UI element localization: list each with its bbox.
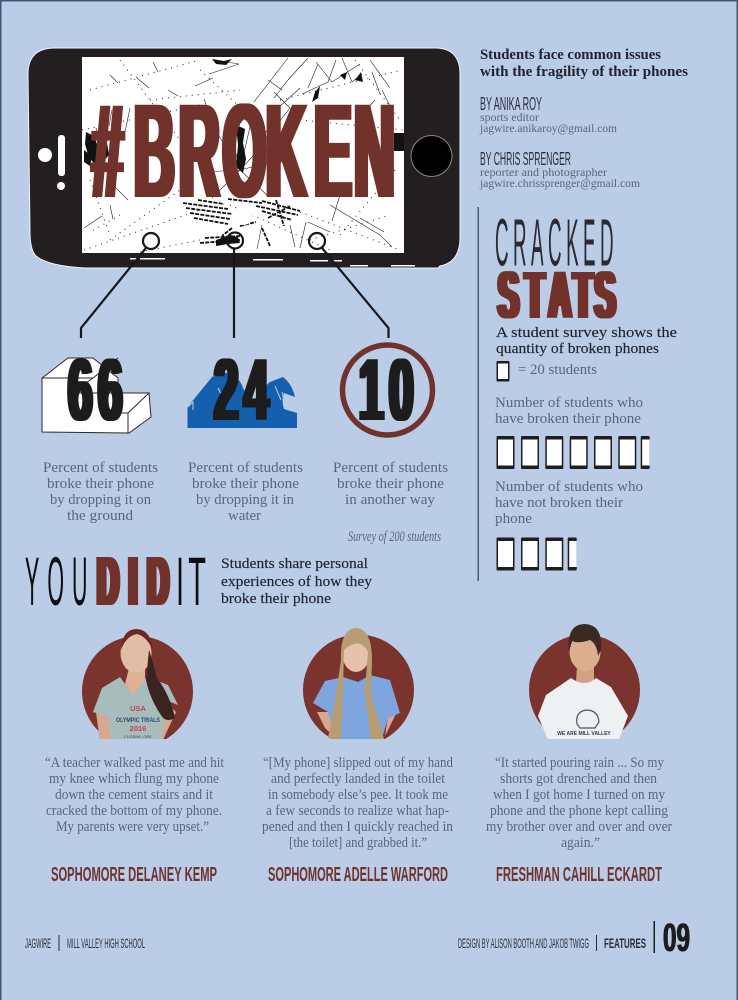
- quote: “[My phone] slipped out of my hand: [263, 755, 453, 771]
- quote: [486, 755, 672, 851]
- home button: [411, 136, 452, 176]
- stat: 66 percent ground: Percent of students: [43, 460, 158, 476]
- stat: 24 percent water: by dropping it in: [196, 492, 294, 508]
- stat: 66 percent ground: 66: [68, 340, 122, 439]
- byline: Chris Sprenger: reporter and photographer: [480, 165, 607, 179]
- phone illustration with cracked screen: [28, 48, 460, 268]
- stat: 10 percent other: in another way: [345, 492, 435, 508]
- panel: cracked stats: [495, 206, 677, 571]
- label: have not broken: [495, 479, 643, 527]
- stat: 24 percent water: water: [228, 508, 261, 524]
- bottom edge highlights: [130, 258, 415, 266]
- byline: Anika Roy: [479, 94, 618, 135]
- byline: Anika Roy: BY ANIKA ROY: [480, 94, 542, 114]
- phone body: [28, 48, 460, 268]
- quote: [262, 755, 453, 851]
- stat: 66 percent ground: [42, 340, 158, 524]
- screen: [82, 57, 404, 253]
- icon: concrete step: [42, 358, 151, 433]
- quote: “A teacher walked past me and hit: [45, 755, 225, 771]
- quote: my brother over and over and over: [486, 819, 672, 835]
- pictogram: unbroken phones: [496, 538, 577, 570]
- stat: 10 percent other: 10: [359, 340, 413, 439]
- you did it intro: Students share personal: [221, 556, 368, 572]
- label: have broken: have broken their phone: [495, 411, 641, 427]
- stat: 10 percent other: broke their phone: [337, 476, 444, 492]
- quote: [45, 755, 225, 835]
- stat: 24 percent water: [188, 340, 303, 524]
- quote: shorts got drenched and then: [500, 771, 657, 787]
- quote: “It started pouring rain ... So my: [495, 755, 664, 771]
- footer: [25, 916, 690, 960]
- stat: 66 percent ground: broke their phone: [47, 476, 154, 492]
- icon: ring: [342, 345, 432, 435]
- camera slot and sensors: [38, 135, 65, 190]
- label: have broken: Number of students who: [495, 395, 643, 411]
- name: SOPHOMORE DELANEY KEMP: [51, 864, 217, 886]
- title #BROKEN: #BROKEN: [92, 76, 395, 226]
- portrait: WE ARE MILL VALLEY: [557, 731, 611, 737]
- heading: you did it: YOU: [25, 543, 96, 620]
- byline: Chris Sprenger: BY CHRIS SPRENGER: [480, 149, 571, 169]
- stat: 24 percent water: broke their phone: [192, 476, 299, 492]
- footer: JAGWIRE: [25, 935, 51, 951]
- byline: Anika Roy: jagwire.anikaroy@gmail.com: [479, 121, 618, 135]
- name: SOPHOMORE ADELLE WARFORD: [268, 864, 448, 886]
- footer: MILL VALLEY HIGH SCHOOL: [67, 935, 145, 951]
- label: have not broken: phone: [495, 511, 532, 527]
- stat: 66 percent ground: by dropping it on: [50, 492, 151, 508]
- footer: FEATURES: [604, 935, 646, 951]
- label: have not broken: have not broken their: [495, 495, 623, 511]
- survey note: Survey of 200 students: [348, 529, 441, 545]
- portrait: [82, 629, 193, 747]
- heading: cracked stats: [495, 206, 618, 333]
- panel: Delaney Kemp: [45, 629, 225, 886]
- stat: 10 percent other: Percent of students: [333, 460, 448, 476]
- label: have broken: [495, 395, 643, 427]
- quote: My parents were very upset.”: [56, 819, 209, 835]
- heading: you did it: IT: [176, 544, 210, 621]
- stat: 10 percent other: [333, 340, 448, 508]
- sidebar rule: [478, 207, 479, 581]
- legend: one phone equals 20 students: = 20 students: [518, 362, 597, 378]
- intro text: [496, 325, 677, 357]
- quote: cracked the bottom of my phone.: [46, 803, 222, 819]
- pictogram: broken phones: [496, 436, 650, 469]
- heading: you did it: DID: [97, 542, 169, 621]
- label: have not broken: Number of students who: [495, 479, 643, 495]
- quote: [the toilet] and grabbed it.”: [289, 835, 427, 851]
- portrait: USA: [130, 704, 146, 713]
- heading: you did it: [25, 542, 210, 621]
- quote: in somebody else’s pee. It took me: [268, 787, 448, 803]
- legend: one phone equals 20 students: [496, 361, 597, 382]
- portrait: 2016: [130, 724, 146, 733]
- byline: Chris Sprenger: jagwire.chrissprenger@gmail.com: [479, 176, 641, 190]
- intro text: quantity of broken phones: [496, 341, 659, 357]
- headline deck: Students face common issues: [480, 47, 661, 63]
- stat: 24 percent water: 24: [214, 340, 269, 439]
- byline: Chris Sprenger: [479, 149, 641, 190]
- quote: pened and then I quickly reached in: [262, 819, 453, 835]
- quote: my knee which flung my phone: [49, 771, 219, 787]
- you did it intro: broke their phone: [221, 591, 331, 607]
- stat: 66 percent ground: the ground: [67, 508, 134, 524]
- quote: down the cement stairs and it: [55, 787, 214, 803]
- you did it intro: [221, 556, 373, 607]
- portrait: EUGENE, ORE: [124, 734, 152, 739]
- byline: Anika Roy: sports editor: [480, 110, 539, 124]
- panel: Cahill Eckardt: [486, 624, 672, 886]
- you did it intro: experiences of how they: [221, 574, 373, 590]
- portrait: [303, 628, 414, 746]
- portrait: [529, 624, 640, 746]
- headline deck: [480, 47, 688, 80]
- quote: a few seconds to realize what hap-: [266, 803, 449, 819]
- quote: again.”: [561, 835, 600, 851]
- stat: 24 percent water: Percent of students: [188, 460, 303, 476]
- heading: cracked stats: STATS: [498, 259, 615, 333]
- quote: and perfectly landed in the toilet: [271, 771, 446, 787]
- footer: 09: [663, 916, 690, 960]
- panel: Adelle Warford: [262, 628, 453, 886]
- portrait: OLYMPIC TRIALS: [116, 718, 160, 724]
- central crack hole: [233, 209, 253, 225]
- heading: cracked stats: CRACKED: [495, 206, 618, 280]
- quote: when I got home I turned on my: [493, 787, 665, 803]
- connector lines from phone to stats: [81, 232, 388, 338]
- icon: waves: [188, 373, 297, 428]
- headline deck: with the fragility of their phones: [480, 64, 688, 80]
- intro text: A student survey shows the: [496, 325, 677, 341]
- quote: phone and the phone kept calling: [490, 803, 668, 819]
